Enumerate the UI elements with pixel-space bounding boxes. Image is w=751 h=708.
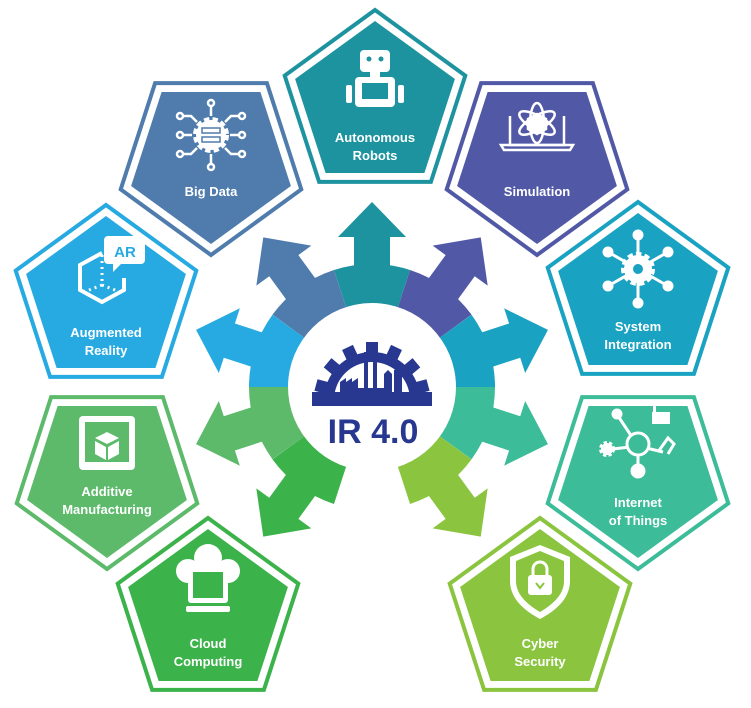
panel: additive manufacturing: Additive bbox=[81, 484, 133, 499]
icon: laptop with cube bbox=[501, 103, 573, 150]
panel: cloud computing: Cloud bbox=[190, 636, 226, 651]
icon: gear factory logo: IR 4.0 bbox=[328, 413, 418, 451]
arrow: additive manufacturing bbox=[184, 375, 309, 480]
icon: robot bbox=[346, 50, 404, 107]
ring of arrows bbox=[184, 202, 560, 559]
panel: augmented reality: AR bbox=[114, 244, 136, 261]
arrow: cyber security bbox=[388, 428, 511, 559]
arrow: autonomous robots bbox=[334, 202, 410, 308]
panel: autonomous robots: Autonomous bbox=[335, 130, 415, 145]
icon: IoT hub bbox=[601, 402, 674, 477]
arrow: big data bbox=[233, 215, 356, 346]
icon: cloud computer bbox=[176, 544, 240, 612]
panel: cloud computing: Computing bbox=[174, 654, 242, 669]
panel: internet of things: of Things bbox=[609, 513, 667, 528]
panel: cyber security: Cyber bbox=[522, 636, 558, 651]
arrow: cloud computing bbox=[233, 428, 356, 559]
arrow: system integration bbox=[435, 294, 560, 399]
icon: shield lock bbox=[510, 545, 570, 619]
icon: 3D printer bbox=[79, 416, 135, 470]
panel: simulation: Simulation bbox=[504, 184, 570, 199]
panel: cloud computing bbox=[118, 518, 298, 690]
panel: internet of things bbox=[548, 397, 728, 569]
panel: augmented reality: Augmented bbox=[70, 325, 142, 340]
panel: system integration bbox=[548, 202, 728, 374]
panel: internet of things: Internet bbox=[614, 495, 663, 510]
center circle bbox=[288, 303, 456, 471]
panel: autonomous robots bbox=[285, 10, 465, 182]
panel: cyber security bbox=[450, 518, 630, 690]
icon: gear factory logo bbox=[312, 342, 432, 451]
icon: AR cube bbox=[80, 253, 124, 302]
arrow: simulation bbox=[388, 215, 511, 346]
panel: augmented reality bbox=[16, 205, 196, 377]
panel: cyber security: Security bbox=[514, 654, 566, 669]
panel: augmented reality: Reality bbox=[85, 343, 128, 358]
icon: data gear bbox=[177, 100, 245, 170]
arrow: augmented reality bbox=[184, 294, 309, 399]
panel: additive manufacturing bbox=[17, 397, 197, 569]
panel: additive manufacturing: Manufacturing bbox=[62, 502, 152, 517]
panel: simulation bbox=[447, 83, 627, 255]
panel: system integration: Integration bbox=[604, 337, 672, 352]
icon: gear network bbox=[604, 231, 672, 307]
panel: big data: Big Data bbox=[185, 184, 238, 199]
panel: autonomous robots: Robots bbox=[353, 148, 397, 163]
panel: big data bbox=[121, 83, 301, 255]
arrow: internet of things bbox=[435, 375, 560, 480]
panel: system integration: System bbox=[615, 319, 661, 334]
